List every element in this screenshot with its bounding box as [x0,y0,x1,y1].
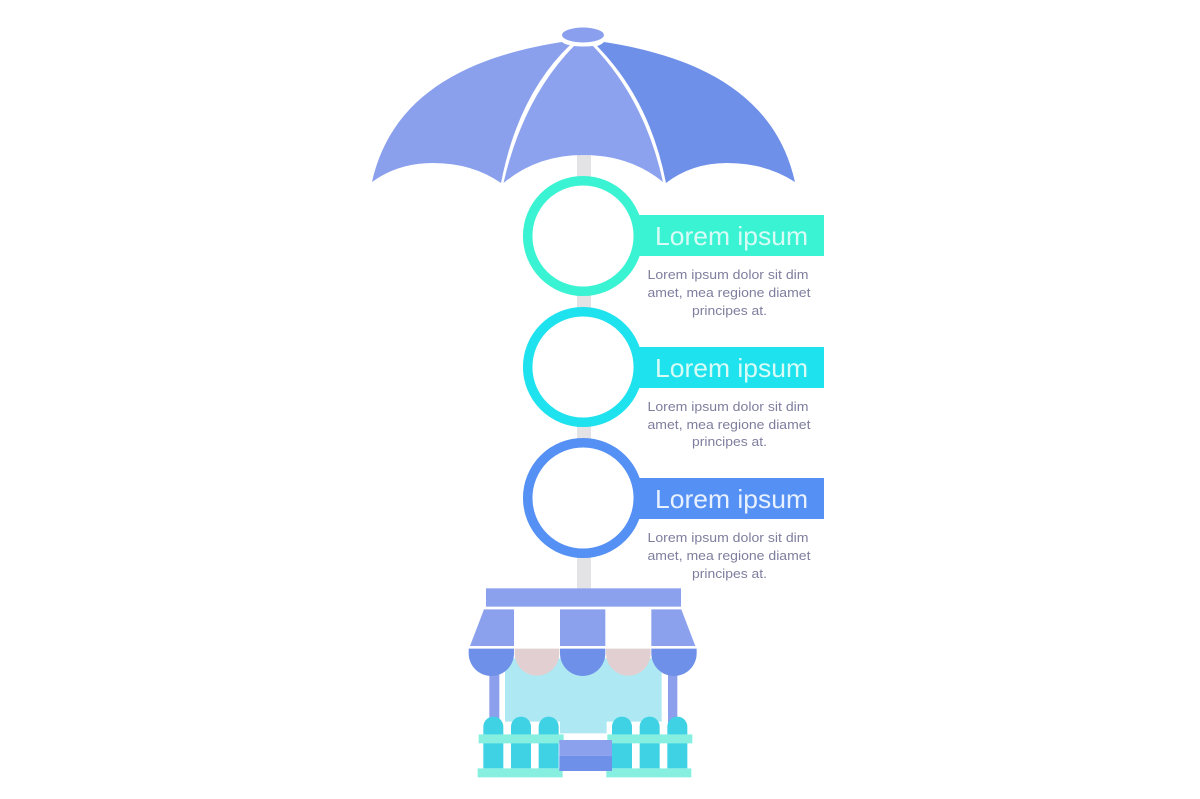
step 1 text: amet, mea regione diamet [648,285,811,300]
step 3 heading: Lorem ipsum [655,484,808,514]
step 1 text: Lorem ipsum dolor sit dim [648,267,809,282]
umbrella cap [562,28,604,42]
awning scallops [515,649,651,676]
step 1 heading: Lorem ipsum [655,221,808,251]
fence pickets [483,717,687,768]
pole [577,150,591,590]
step 1 banner [625,215,824,256]
awning valance [469,649,697,676]
step 1 ring [528,181,638,291]
umbrella center panel [504,46,663,183]
step 2 text: Lorem ipsum dolor sit dim [648,399,809,414]
step 1 text: principes at. [692,303,767,318]
step 2 heading: Lorem ipsum [655,353,808,383]
umbrella left panel [372,42,570,183]
step 3 banner [625,478,824,519]
step 3 text: principes at. [692,566,767,581]
umbrella right panel [597,42,795,183]
step 2 [528,312,824,449]
shop roof [486,588,681,607]
step 3 ring [528,443,638,553]
step 2 text: amet, mea regione diamet [648,417,811,432]
shop window [505,658,662,733]
step 2 banner [625,347,824,388]
step 2 text: principes at. [692,434,767,449]
step 3 [528,443,824,581]
step 3 text: Lorem ipsum dolor sit dim [648,530,809,545]
fence rails [478,734,692,777]
umbrella [372,28,795,183]
shop [469,588,697,777]
awning stripes [470,609,695,646]
shop steps [559,740,612,771]
shop posts [489,673,677,723]
step 3 text: amet, mea regione diamet [648,548,811,563]
step 1 [528,181,824,318]
step 2 ring [528,312,638,422]
